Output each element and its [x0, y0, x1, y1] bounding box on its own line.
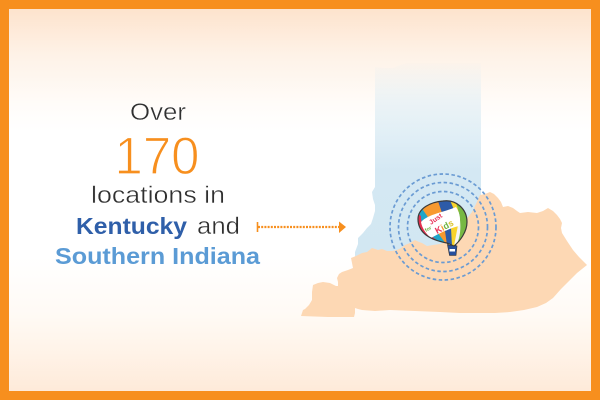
Kentucky shape — [301, 192, 587, 317]
text: Just: Just — [428, 212, 444, 227]
text: Over: Over — [130, 99, 186, 126]
text: Kentucky: Kentucky — [76, 213, 187, 239]
ropes and basket — [447, 243, 457, 256]
white banner — [421, 207, 460, 238]
text: for: for — [424, 225, 433, 234]
arrow pointing to map — [258, 222, 346, 233]
balloon outline — [418, 201, 467, 246]
text: Kids: Kids — [433, 218, 455, 236]
text: locations in: locations in — [91, 182, 225, 209]
balloon envelope — [418, 201, 466, 246]
location rings — [390, 174, 496, 280]
Southern Indiana shape — [355, 63, 481, 262]
text: Southern Indiana: Southern Indiana — [55, 243, 260, 269]
icon: Just for Kids hot air balloon — [417, 200, 468, 256]
map of Indiana and Kentucky — [301, 63, 587, 317]
logo text — [424, 212, 455, 236]
text: and: and — [197, 213, 240, 240]
number: 170: 170 — [114, 127, 200, 186]
headline text block — [55, 99, 260, 269]
